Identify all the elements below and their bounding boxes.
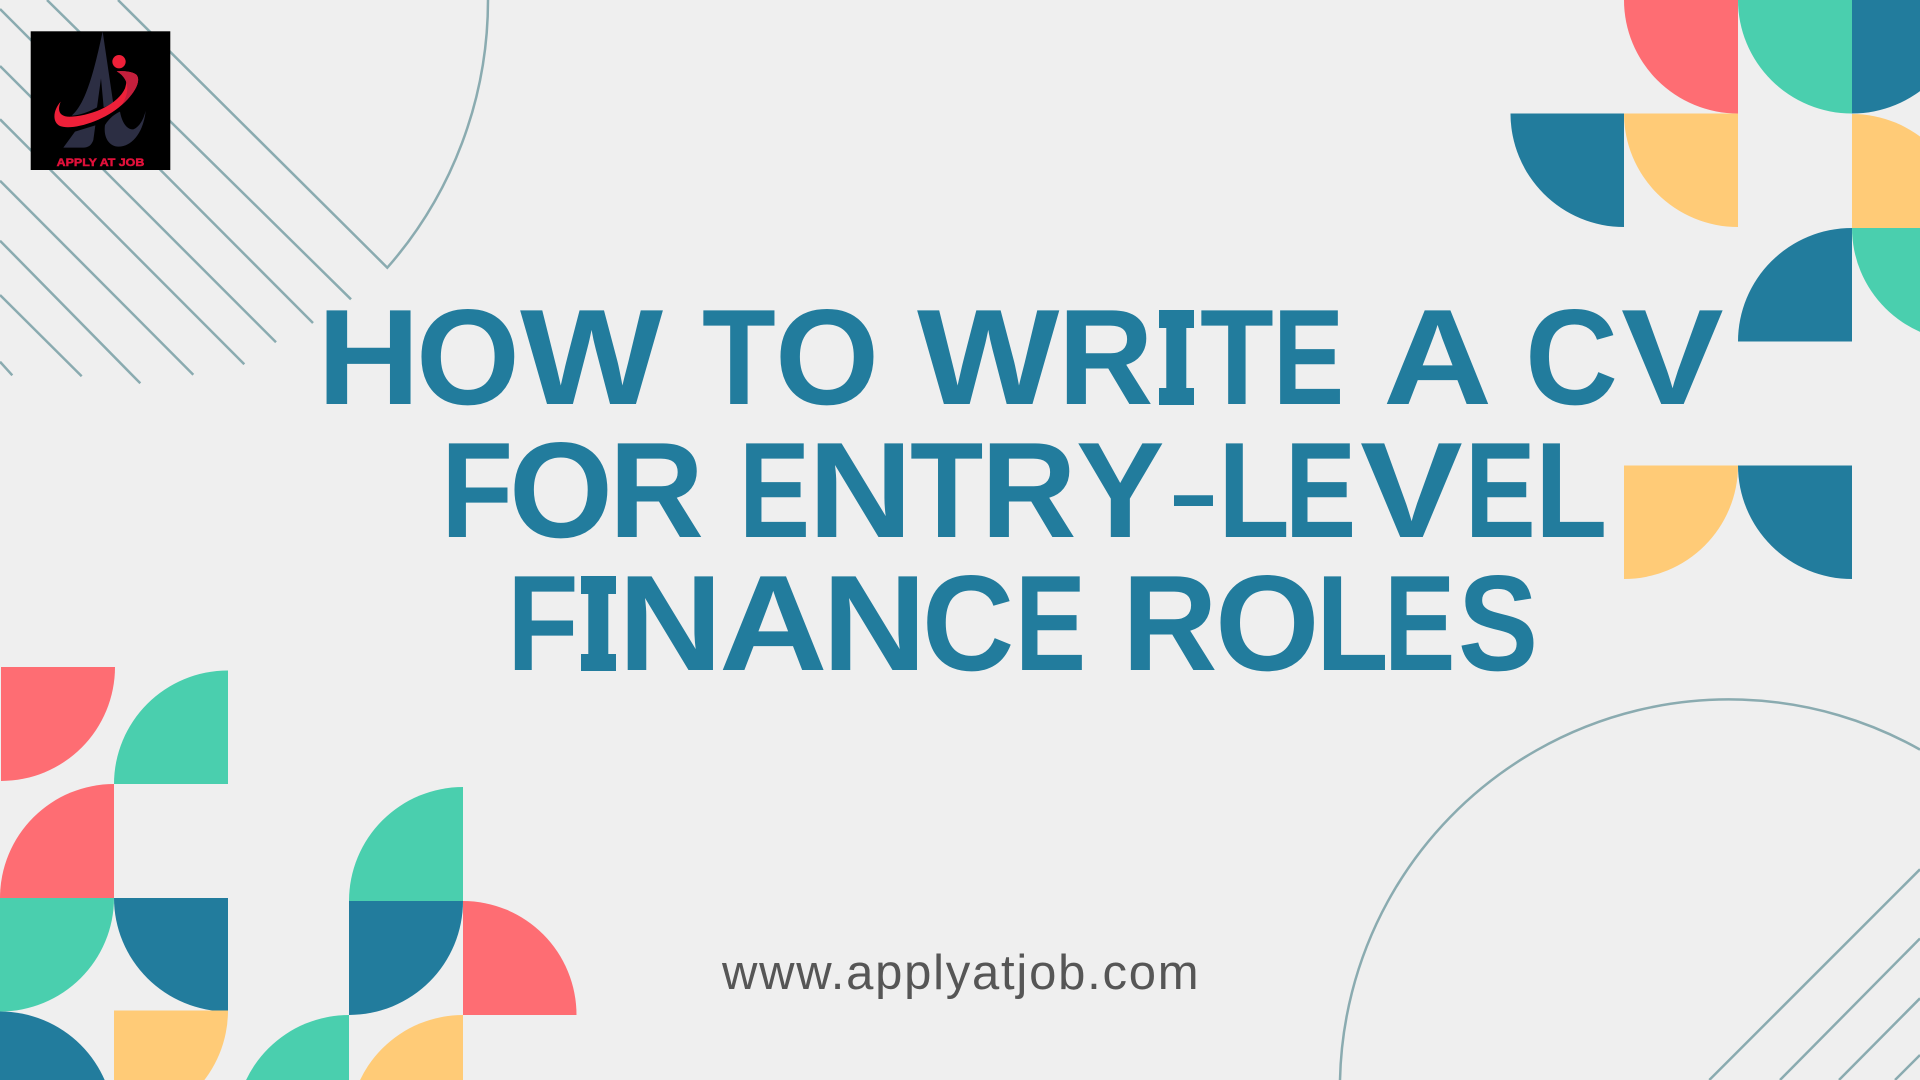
quarter: yellow [1624, 114, 1738, 227]
title line 1: I [1157, 281, 1195, 433]
quarter-circle cluster: top right [1510, 0, 1920, 342]
quarter: red [1, 667, 115, 781]
quarter: teal lower [0, 898, 114, 1012]
quarter-circle pair: right of title [1624, 466, 1852, 579]
quarter: yellow bottom [114, 1010, 228, 1080]
title line 1: V [1621, 281, 1724, 433]
title line 3: C [922, 547, 1015, 699]
title line 2: T [910, 414, 983, 566]
title line 2: E [739, 414, 810, 566]
quarter: teal [349, 787, 463, 901]
title line 3: N [822, 547, 927, 699]
title line 3: N [618, 547, 723, 699]
line art: bottom-right arc and diagonal lines [1340, 699, 1920, 1080]
quarter: blue [1738, 466, 1852, 579]
quarter: dark blue corner [1852, 0, 1920, 114]
logo: Apply at Job [31, 31, 170, 170]
title line 1: E [1273, 281, 1344, 433]
title line 1: W [520, 281, 663, 433]
title line 3: A [719, 547, 828, 699]
title line 1: O [775, 281, 879, 433]
title line 1: A [1383, 281, 1492, 433]
title line 1: T [1200, 281, 1274, 433]
title [317, 281, 1724, 699]
title line 1: C [1525, 281, 1618, 433]
title line 3: L [1316, 547, 1389, 699]
title line 1 [317, 281, 1724, 672]
title line 2: O [509, 414, 612, 566]
quarter: red lower [0, 784, 114, 898]
quarter: teal bottom [235, 1015, 349, 1080]
quarter: blue [1510, 114, 1624, 227]
quarter: red [1624, 0, 1738, 114]
title line 2: L [1535, 414, 1608, 566]
title line 1: W [917, 281, 1059, 433]
quarter-circle cluster: bottom centre-left [235, 787, 576, 1080]
title line 1: O [416, 281, 520, 433]
title line 2: E [1465, 414, 1536, 566]
title line 3: I [579, 547, 618, 699]
title line 2: - [1168, 443, 1219, 543]
title line 1: H [317, 281, 420, 433]
title line 3: E [1384, 547, 1455, 699]
title line 2: F [441, 414, 514, 566]
quarter: blue middle [1738, 228, 1852, 342]
line art: top-left diagonal lines and arc [0, 0, 488, 383]
quarter: red [463, 901, 576, 1015]
title line 3: O [1215, 547, 1319, 699]
quarter: teal [114, 670, 228, 784]
quarter: blue [349, 901, 463, 1015]
quarter: yellow [1624, 466, 1738, 579]
title line 3: E [1015, 547, 1086, 699]
title line 2: N [808, 414, 913, 566]
title line 2: Y [1076, 414, 1165, 566]
title line 2: V [1360, 414, 1463, 566]
quarter: blue [114, 898, 228, 1012]
title line 2: L [1218, 414, 1290, 566]
quarter-circle cluster: bottom left [0, 667, 228, 1080]
title line 1: R [1058, 281, 1154, 433]
quarter: teal [1738, 0, 1852, 114]
title line 3: S [1458, 547, 1538, 699]
logo background [31, 31, 170, 170]
title line 2 [441, 414, 1608, 672]
quarter: yellow bottom [349, 1015, 463, 1080]
title line 3: R [1122, 547, 1217, 699]
website url: www.applyatjob.com [722, 946, 1200, 1000]
title line 2: R [981, 414, 1076, 566]
logo wordmark: APPLY AT JOB [57, 157, 144, 169]
title line 2: R [609, 414, 704, 566]
title line 1: T [702, 281, 776, 433]
quarter: yellow right edge [1852, 114, 1920, 228]
logo mark [54, 32, 146, 148]
title line 3: F [507, 547, 578, 699]
quarter: blue bottom [0, 1012, 114, 1080]
quarter: teal right edge [1852, 228, 1920, 342]
title line 2: E [1285, 414, 1356, 566]
title line 3 [507, 547, 1538, 699]
